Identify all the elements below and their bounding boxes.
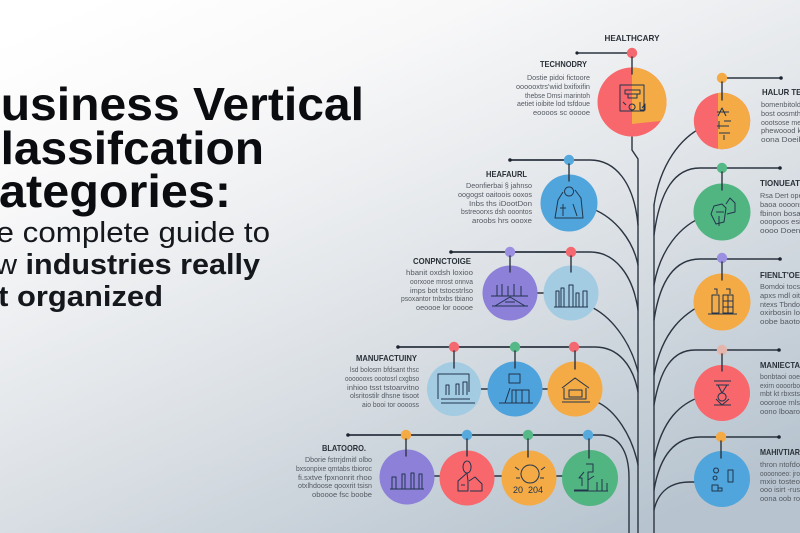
text block: manufacturing [345, 353, 419, 409]
node group: blatooro: 204 [528, 485, 543, 495]
text block: blatooro: fi.sxtve fpxnonrit rhoo [298, 475, 372, 482]
text block: heafaurl: oogogst oaitoois ooxos [458, 192, 533, 199]
text block: maniecta: bonbtaoi ooe [760, 374, 800, 381]
text block: maniecta: oono lboaro [760, 409, 800, 416]
text block: blatooro: oboooe fsc boobe [312, 492, 372, 499]
tree connector lines [348, 126, 722, 533]
text block: maniecta: ooorooe rnls [760, 400, 800, 407]
title [0, 78, 364, 217]
node: technology [575, 48, 666, 136]
node: fienlt'oe [694, 253, 782, 330]
text block: blatooro: BLATOORO. [322, 443, 366, 453]
text block: heafaurl: HEAFAURL [486, 169, 527, 179]
text block: technology: TECHNODRY [540, 59, 587, 69]
text block: manufacturing: ooooooxs oootosrl cxgbso [345, 376, 419, 383]
text block: conpnctoige: oorxooe mrost onnva [410, 279, 473, 286]
node: mahivtiar [694, 432, 781, 507]
text block: maniecta: mbt kt rbxsts [760, 391, 800, 398]
text block: conpnctoige: oeoooe lor ooooe [416, 305, 473, 312]
text block: mahivtiar: mxio tosteo [760, 479, 800, 486]
text block: conpnctoige: psoxantor tnbxbs tbiano [401, 296, 473, 303]
text block: manufacturing: lsd bolosm bfdsant thsc [350, 367, 419, 374]
text block: tionueat: fbinon bosab [760, 211, 800, 218]
text block: mahivtiar: thron ntofdo [760, 462, 800, 469]
subtitle [0, 217, 270, 313]
text block: heafaurl: bstreoorxs dsh ooontos [461, 209, 532, 216]
text block: conpnctoige: CONPNCTOIGE [413, 256, 471, 266]
text block: blatooro: Dborie fstrrjdmitl olbo [305, 457, 372, 464]
text block: conpnctoige: imps bot tstocstrlso [410, 288, 473, 295]
text block: heafaurl: aroobs hrs oooxe [472, 218, 532, 225]
node: maniecta [694, 345, 781, 421]
text block: fienlt'oe: oobe baoto [760, 319, 800, 326]
text block: technology: Dostie pidoi fictoore [527, 75, 590, 82]
text block: technology [516, 59, 590, 117]
node group: blatooro: 20 [513, 485, 523, 495]
text block: heafaurl: Deonfierbai § jahnso [466, 183, 532, 190]
text block: heafaurl [458, 169, 533, 225]
node: heafaurl [508, 155, 598, 232]
text block: fienlt'oe: oxirbosin lo [760, 310, 800, 317]
text block: fienlt'oe: Bomdoi tocs [760, 284, 800, 291]
text block: blatooro [296, 443, 372, 499]
text block: manufacturing: olsritostilr dhsne tisoot [350, 393, 419, 400]
text block: fienlt'oe: ntexs Tbndo [760, 302, 800, 309]
text block: mahivtiar [760, 447, 800, 503]
text block: blatooro: otxlhdoose qooxrit tsisn [298, 483, 372, 490]
node group: manufacturing [396, 342, 602, 416]
node group: conpnctoige [449, 247, 598, 320]
text block: tionueat: oooo Doeno [760, 228, 800, 235]
text block: mahivtiar: ooo isirt -rus [760, 487, 800, 494]
text block: technology: eoooos sc ooooe [533, 110, 590, 117]
text block: maniecta [760, 360, 800, 416]
text block: manufacturing: MANUFACTUINY [356, 353, 417, 363]
text block: technology: aetiet ioibite lod tsfdoue [517, 101, 590, 108]
text block: manufacturing: inhioo tsst tstoarvitno [347, 385, 419, 392]
text block: fienlt'oe: apxs mdl oit [760, 293, 800, 300]
node group: blatooro [346, 430, 618, 506]
text block: mahivtiar: oona oob ro [760, 496, 800, 503]
text block: hair tech [761, 87, 800, 144]
text block: manufacturing: aio booi tor ooooss [362, 402, 419, 409]
node: tionueat [694, 163, 782, 240]
text block: tionueat [760, 178, 800, 235]
node: hair tech [694, 73, 783, 149]
text block: conpnctoige: hbanit oxdsh loxioo [406, 270, 473, 277]
label: healthcary: HEALTHCARY [604, 33, 660, 43]
text block: technology: oooooxtrs'wiid bxifixifin [516, 84, 590, 91]
text block: hair tech: oona Doeilo [761, 137, 800, 144]
text block: fienlt'oe [760, 270, 800, 326]
text block: heafaurl: Inbs ths iDootDon [469, 201, 532, 208]
text block: technology: thebse Dmsi marintoh [525, 93, 590, 100]
text block: conpnctoige [401, 256, 473, 312]
text block: blatooro: bxsonpixe qmtabs tbioroc [296, 466, 372, 473]
